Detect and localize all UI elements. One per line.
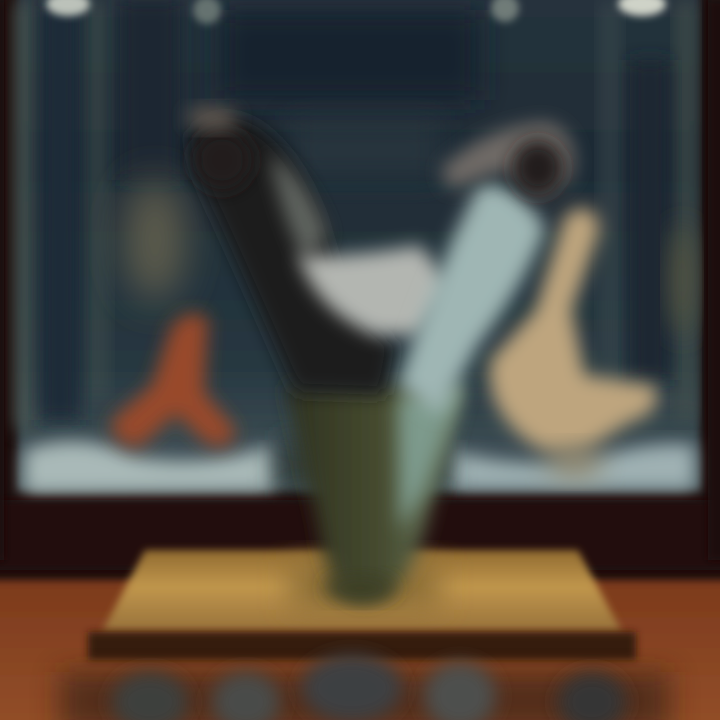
left dark plume bbox=[186, 106, 395, 395]
white cloth bbox=[298, 245, 455, 335]
right pale plume bbox=[398, 122, 574, 415]
figure: orange-red shape bbox=[112, 314, 236, 448]
row of stones bbox=[60, 654, 670, 720]
wooden floor bbox=[0, 580, 720, 720]
ceiling lights bbox=[46, 0, 666, 24]
figure: cream shape on right bbox=[489, 208, 694, 478]
background figure: grey left bbox=[125, 178, 185, 302]
dark window ledge bbox=[0, 0, 720, 570]
table bbox=[88, 550, 636, 660]
snowy window sill bbox=[24, 440, 695, 494]
vase body bbox=[285, 385, 465, 602]
window: night scene with vertical bars bbox=[12, 0, 700, 490]
